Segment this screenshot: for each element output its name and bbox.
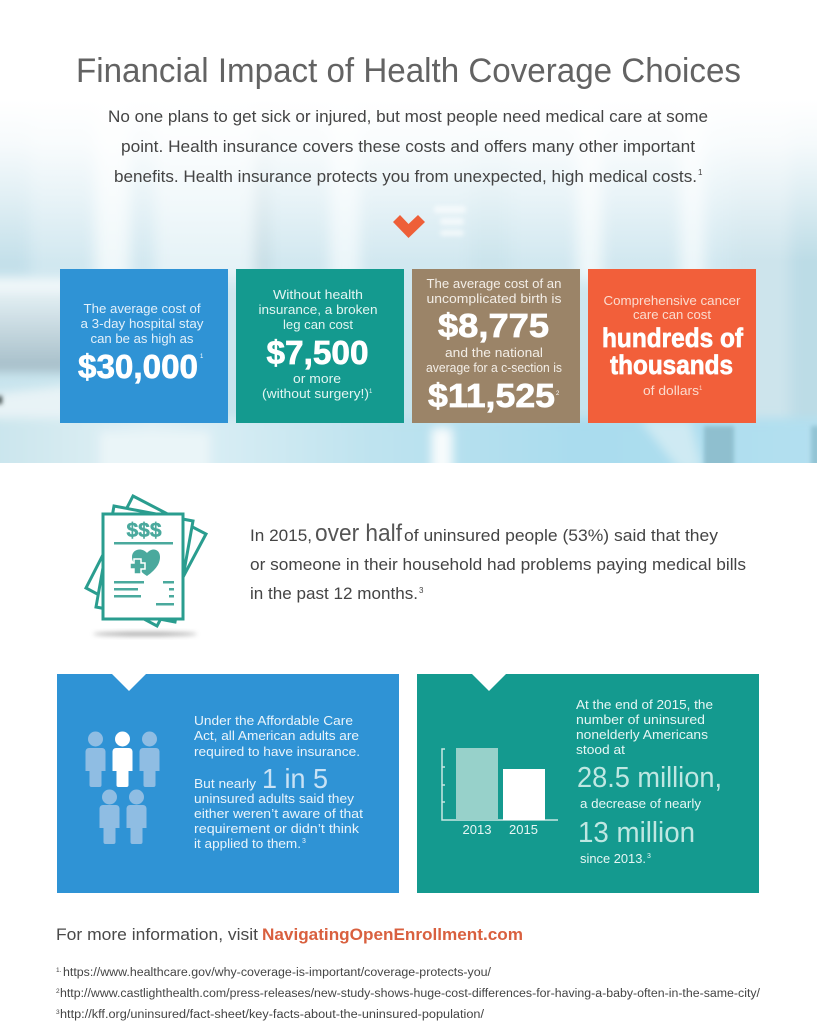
icon: medical bills (86, 496, 206, 636)
text: aca requirement: it applied to them. (194, 836, 301, 851)
icon: chevron arrow down (393, 215, 425, 238)
card: birth cost: uncomplicated birth is (426, 291, 562, 306)
call to action: more information (56, 926, 523, 944)
text: aca requirement (194, 713, 363, 851)
card: broken leg cost (236, 269, 404, 423)
card: cancer care cost: of dollars (643, 383, 700, 398)
statement: over half of uninsured: In 2015, (250, 527, 312, 545)
card: birth cost: The average cost of an (426, 276, 562, 291)
bar chart: uninsured 2013 vs 2015 (442, 748, 558, 837)
panel: uninsured decline (417, 674, 759, 893)
text: aca requirement: Act, all American adults are (194, 728, 359, 743)
text: aca requirement: uninsured adults said they (194, 791, 355, 806)
card: hospital stay cost: The average cost of (84, 301, 201, 316)
call to action: more information: NavigatingOpenEnrollment.com (262, 926, 523, 944)
text: aca requirement: Under the Affordable Care (194, 713, 353, 728)
footnotes: references: https://www.healthcare.gov/why-coverage-is-important/coverage-protects-you/ (63, 967, 492, 979)
footnotes: references: 1. (56, 967, 62, 974)
card: birth cost: and the national (445, 345, 543, 360)
card: cancer care cost: Comprehensive cancer (604, 293, 741, 308)
text: uninsured figures: stood at (576, 742, 625, 757)
text: uninsured figures: number of uninsured (576, 712, 705, 727)
icon: medical bills: $$$ (126, 520, 162, 542)
call to action: more information: For more information, visit (56, 926, 258, 944)
card: cancer care cost: thousands (610, 350, 733, 380)
title: Financial Impact of Health Coverage Choices (76, 52, 741, 90)
intro paragraph: benefits. Health insurance protects you from unexpected, high medical costs. (114, 168, 697, 186)
text: aca requirement: But nearly (194, 776, 257, 791)
card: hospital stay cost: can be as high as (90, 331, 194, 346)
card: broken leg cost: or more (293, 371, 341, 386)
intro paragraph: point. Health insurance covers these costs and offers many other important (121, 138, 695, 156)
card: birth cost: average for a c-section is (426, 360, 562, 375)
card: broken leg cost: 1 (369, 389, 373, 395)
statement: over half of uninsured: in the past 12 months. (250, 585, 418, 603)
text: aca requirement: 1 in 5 (262, 763, 328, 794)
bar chart: uninsured 2013 vs 2015: 2013 (462, 823, 492, 837)
footnotes: references (56, 967, 761, 1021)
footnotes: references: http://kff.org/uninsured/fact-sheet/key-facts-about-the-uninsured-population/ (60, 1009, 485, 1021)
text: uninsured figures: 3 (647, 853, 651, 860)
card: cancer care cost: hundreds of (602, 323, 744, 353)
footnotes: references: 3 (56, 1009, 60, 1016)
card: birth cost (412, 269, 580, 423)
intro paragraph (108, 108, 708, 186)
card: cancer care cost: 1 (699, 386, 703, 392)
statement: over half of uninsured: or someone in their household had problems paying medical bills (250, 556, 746, 574)
statement: over half of uninsured: over half (315, 520, 402, 547)
card: cancer care cost (588, 269, 756, 423)
text: uninsured figures: 13 million (578, 817, 695, 849)
intro paragraph: 1 (698, 168, 703, 177)
intro paragraph: No one plans to get sick or injured, but most people need medical care at some (108, 108, 708, 126)
statement: over half of uninsured (250, 520, 746, 603)
text: aca requirement: either weren’t aware of that (194, 806, 363, 821)
card: hospital stay cost: a 3-day hospital stay (80, 316, 204, 331)
text: aca requirement: 3 (302, 838, 306, 845)
text: aca requirement: required to have insurance. (194, 744, 360, 759)
text: uninsured figures: At the end of 2015, the (576, 697, 713, 712)
statement: over half of uninsured: 3 (419, 586, 424, 595)
footnotes: references: 2 (56, 988, 60, 995)
card: broken leg cost: $7,500 (266, 334, 368, 371)
text: aca requirement: requirement or didn’t think (194, 821, 360, 836)
bar chart: uninsured 2013 vs 2015: 2015 (509, 823, 538, 837)
card: broken leg cost: leg can cost (283, 317, 353, 332)
icon: group of people (86, 732, 160, 844)
icon shadow (93, 632, 197, 636)
card: hospital stay cost: 1 (200, 354, 204, 360)
card: birth cost: $11,525 (428, 377, 555, 414)
footnotes: references: http://www.castlighthealth.com/press-releases/new-study-shows-huge-cost-differences-for-having-a-baby-often-in-the-same-city/ (60, 988, 761, 1000)
hero background: blurred hospital corridor (0, 135, 817, 463)
card: birth cost: 2 (556, 391, 560, 397)
text: uninsured figures: since 2013. (580, 851, 646, 866)
card: broken leg cost: insurance, a broken (258, 302, 378, 317)
card: cancer care cost: care can cost (633, 307, 711, 322)
statement: over half of uninsured: of uninsured people (53%) said that they (404, 527, 719, 545)
card: birth cost: $8,775 (438, 307, 549, 344)
card: hospital stay cost (60, 269, 228, 423)
panel: affordable care act (57, 674, 399, 893)
card: hospital stay cost: $30,000 (78, 348, 198, 385)
text: uninsured figures: nonelderly Americans (576, 727, 709, 742)
text: uninsured figures (576, 697, 722, 866)
card: broken leg cost: Without health (273, 287, 363, 302)
text: uninsured figures: 28.5 million, (577, 762, 722, 794)
card: broken leg cost: (without surgery!) (262, 386, 369, 401)
text: uninsured figures: a decrease of nearly (580, 796, 702, 811)
